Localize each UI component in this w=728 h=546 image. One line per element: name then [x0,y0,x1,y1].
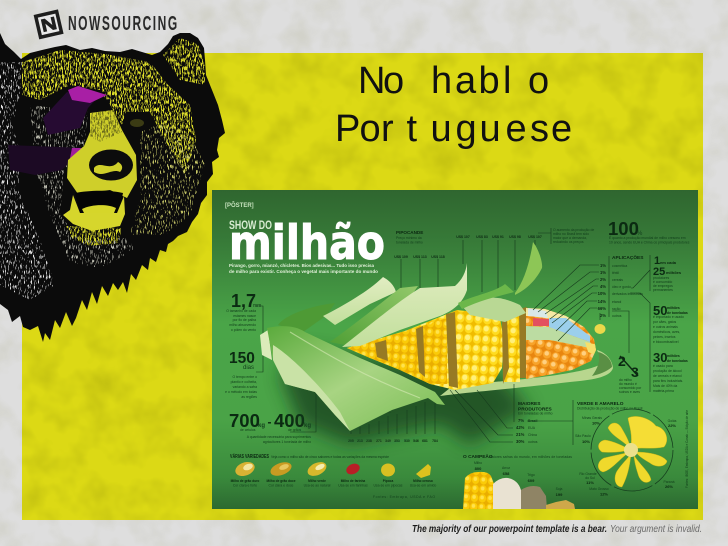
bar values: 353 [394,439,400,443]
stat: 700 kg / 400 kg: de grãos [288,428,301,432]
section: o campeao: O CAMPEÃO [463,453,493,460]
stat: 1,7 mm: mm [253,303,261,309]
stat: 50 milhões [630,293,688,392]
kernel: pipoca [373,464,403,488]
front leaf vein [290,332,420,398]
ring chart [591,409,673,491]
stat: 2/3: 2 [618,353,626,369]
usage names: etanol [612,300,621,304]
right leaf tip [515,242,542,295]
stat: 2/3: suínos e aves [619,390,640,394]
usage percentages [598,263,606,318]
heading: pipocando: PIPOCANDE [396,230,423,235]
credit line: Fontes: Embrapa, USDA e FAO [373,495,435,499]
stat: 700 kg / 400 kg: kg [304,423,311,429]
price lines [401,240,535,292]
poster tag: [PÔSTER] [225,201,254,209]
yellow tip [585,342,596,354]
bear nostrils highlight [94,162,122,174]
poster background [212,190,698,509]
usage names: derivados industriais [612,292,643,296]
stat: 30 milhões: Mais de 40% da [653,384,677,388]
producer rows [516,418,525,444]
kernel: milho de farinha: Usa-se em farinhas [338,484,368,488]
stat: 2/3: do mundo é [619,382,637,386]
state labels: 10% [582,439,590,444]
usage percentages: 10% [598,291,606,296]
grain pile labels [474,461,563,497]
grain pile: rice [493,478,521,509]
fur: yellow forehead [22,50,196,175]
top white kernels [526,308,578,323]
producer rows: 7% [518,418,524,423]
kernel: pipoca: Usa-se em pipocas [373,484,403,488]
state labels [575,416,677,496]
right leaf green [458,284,514,309]
grain pile: corn [463,472,494,509]
kernel: milho de farinha: Milho de farinha [341,479,365,483]
price labels [394,235,542,259]
section: verde e amarelo [527,400,689,496]
stat: 1 a cada 25 milhões: permanentes [653,288,673,292]
kernel: milho de grão dentado [266,460,296,488]
icon: single kernel [594,313,606,334]
stat: 150 dias: e o método em todas [225,390,257,394]
stat: 700 kg / 400 kg [229,392,316,444]
state labels: 12% [600,492,608,496]
price note [538,228,594,244]
stat: 30 milhões: é usado para [653,364,673,368]
stat: 150 dias: O tempo entre o [232,375,257,379]
bar values: 530 [404,439,410,443]
stat: 30 milhões [653,350,688,393]
section: maiores produtores: Em toneladas de milho [518,412,553,416]
bear lips [63,195,125,231]
eye stripe: dark purple bolt [43,92,100,135]
stat: 1,7 mm: por fio de palha [233,318,256,322]
kernel: milho de grão duro: Milho de grão duro [231,479,259,483]
bar values: 238 [366,439,372,443]
stat: 1 a cada 25 milhões: é consumido [653,280,672,284]
price note: milho no Brasil tem sido [553,232,589,236]
stat: 30 milhões: de cereais e etanol [653,374,682,378]
section: verde e amarelo: Distribuição da produção de milho no Brasil [577,406,643,410]
poster intro text: de milho para existir. Conheça o vegetal mais importante do mundo [229,269,378,274]
blue band [549,318,590,342]
bar values: 784 [432,439,438,443]
kernel: milho de grão dentado: Cor clara e doce [269,484,294,488]
stat: 1,7 mm: o pólen do vento [231,328,256,332]
poster intro text [229,263,378,274]
kernel: milho ceroso: Usa-se em amido [410,484,436,488]
state labels: 22% [668,423,676,428]
stat: 1,7 mm: O tamanho de cada [226,309,256,313]
fur: right cheek [130,122,205,235]
state labels: São Paulo [575,434,591,438]
usage percentages: 2% [600,277,606,282]
grain pile labels: 658 [503,471,510,476]
corn: kernels [347,305,613,396]
bear snout [67,110,137,198]
section: o campeao: Maiores safras do mundo, em milhões de toneladas [489,455,572,459]
kernel: milho de grão dentado: Milho de grão doce [266,479,296,483]
stat: 1 a cada 25 milhões: de empregos [653,284,673,288]
section: sobe e sobe: SOBE E SOBE [349,404,384,410]
usage names: outros [612,314,622,318]
stat: 700 kg / 400 kg: de cetulos [240,428,256,432]
stat: 30 milhões: milhões [667,354,680,358]
stat: 1 a cada 25 milhões [631,255,682,292]
title line 1: Nohablo [358,60,549,102]
pale back leaf [323,277,396,325]
state labels: 10% [592,420,600,426]
price note: maior que a demanda, [553,236,587,240]
caption regular part: Your argument is invalid. [610,524,702,535]
usage percentages: 1% [600,270,606,275]
stat: 700 kg / 400 kg: kg [258,423,265,429]
grain pile labels: 199 [556,492,563,497]
eye stripe: magenta highlight [68,86,107,103]
illustration: bear head [0,33,225,342]
state labels: 26% [665,484,673,489]
bear tongue [82,205,116,213]
stat: 150 dias: 150 [229,350,255,367]
producer rows: 42% [516,425,525,430]
logo: Nowsourcing [34,9,177,39]
grain pile: soy [546,500,575,509]
price labels: US$ 113 [413,255,427,259]
left deeper-yellow cob [347,318,447,384]
grain pile labels: Trigo [527,473,535,477]
stat: 50 milhões: e outros animais [653,325,678,329]
corn: husk leaves [260,242,542,431]
section: sobe e sobe: Produção mundial de milho, [349,410,391,414]
grain pile labels: Milho [474,461,482,465]
bear mouth [75,191,123,213]
usage percentages: 66% [598,306,606,311]
kernel: milho verde: Milho verde [308,479,326,483]
heading: aplicações: APLICAÇÕES [612,254,644,261]
title [335,60,572,150]
dark leaf under corn end [592,352,612,376]
stat: 1,7 mm: milho absorvendo [229,323,256,327]
stat: 50 milhões: milhões [667,306,680,310]
stat: 50 milhões: 50 [653,303,667,318]
stat: 50 milhões: é importado e usado [653,315,684,319]
grain pile labels: 609 [528,478,535,483]
green band [526,326,591,348]
section: o campeao [463,453,575,509]
price note: reduzindo os preços [553,240,584,244]
producer names [528,419,538,444]
kernel: pipoca: Pipoca [383,479,393,483]
section: maiores produtores: PRODUTORES [518,406,553,412]
stat: 50 milhões: domésticos, aves, [653,330,680,334]
stat: 700 kg / 400 kg: A quantidade necessária para suprimentos [247,435,311,439]
flower of corn kernels [598,416,667,487]
section: verde e amarelo: VERDE E AMARELO [577,401,624,407]
price note: O aumento da produção de [553,228,594,232]
stat: 1 a cada 25 milhões: milhões [666,270,682,275]
stat: 1 a cada 25 milhões: produtores [653,276,670,280]
stat: 50 milhões: e biocombustível [653,340,679,344]
grain pile labels: 800 [475,466,482,471]
stat: 2/3 [612,311,642,394]
price labels: US$ 83 [476,235,488,239]
kernel: milho de farinha [338,462,368,488]
stat: 30 milhões: para fins industriais. [653,379,683,383]
stat: 30 milhões: matéria-prima [653,389,674,393]
stat: 1,7 mm: estames nasce [233,314,256,318]
state labels: Goiás [668,419,677,423]
stat: 100%: 100 [608,218,639,239]
back dark leaf [278,303,335,332]
section: varias variedades: VÁRIAS VARIEDADES [230,453,269,460]
section: aplicacoes [533,254,644,341]
stat: 1 a cada 25 milhões: em cada [660,260,677,265]
bear nose [89,150,133,180]
vertical credit: Fontes: IBGE, Embrapa, USDA e Conab — Edição de arte [685,410,689,488]
stat: 2/3: consumido por [619,386,642,390]
stat: 1 a cada 25 milhões: 25 [653,266,665,278]
fur: grey hatching around the snout [30,105,135,268]
title line 2: Portuguese [335,108,572,150]
chart: sobe e sobe [348,398,438,443]
state labels: do Sul [585,476,595,480]
bar values: 349 [385,439,391,443]
bar lines by year [351,398,435,434]
bar values [348,439,438,443]
stat: 1,7 mm [226,291,263,334]
producer names: China [528,433,537,437]
left pale strip [260,330,272,360]
stat: 50 milhões: por cães, gatos [653,320,676,324]
stat: 150 dias: plantio e colheita, [231,380,257,384]
stat: 50 milhões: de toneladas [667,311,688,315]
section: pipoca prices: Preço mínimo da [396,236,422,240]
stat: 30 milhões: de toneladas [667,359,688,363]
price labels: US$ 118 [431,255,445,259]
usage percentages: 4% [600,284,606,289]
price labels: US$ 91 [492,235,504,239]
usage percentages: 14% [598,299,606,304]
coloured cob end [526,308,596,379]
stat: 100%: É quanto a produção mundial de milho cresceu em [609,235,686,240]
kernel: milho ceroso [410,464,436,488]
poster intro text: Pirango, gorro, mianzó, chicletes. Bios adesivas... Tudo isso precisa [229,263,375,268]
section: pipoca prices: tonelada de milho [396,240,423,244]
usage leader lines [533,265,599,341]
stat: 700 kg / 400 kg: 400 [274,410,305,431]
price labels: US$ 109 [394,255,408,259]
producer names: outros [528,440,538,444]
state labels: 11% [586,480,594,485]
footer caption [412,524,702,535]
front leaf fold [273,345,350,431]
producer rows: 30% [516,439,525,444]
stat: 1 a cada 25 milhões: 1 [654,255,660,267]
usage names: ração [612,307,621,311]
kernel: milho de grão duro [231,459,259,488]
stat: 150 dias: as regiões [241,395,257,399]
stat: 2/3: do milho [619,378,632,382]
bar values: 681 [422,439,428,443]
fur: white hatching on the left [0,62,55,300]
stat: 150 dias: variando a safra [233,385,257,389]
right leaf lower pale [460,297,526,322]
section: sobe e sobe: em toneladas [349,414,370,418]
bar values: 213 [357,439,363,443]
heading: milhão: milhão [229,216,385,271]
price labels: US$ 107 [528,235,542,239]
heading: show do: SHOW DO [229,218,272,232]
fur: yellow on the ear [163,38,205,85]
stat: 50 milhões: peixes, insetos [653,335,676,339]
price labels: US$ 98 [509,235,521,239]
bar values: 546 [413,439,419,443]
stat: 1,7 mm: 1,7 [231,291,256,311]
producer rows: 21% [516,432,525,437]
grain pile labels: Soja [556,487,563,491]
price labels: US$ 107 [456,235,470,239]
yellow cob [347,310,504,390]
pale band [528,308,548,318]
bear silhouette [0,33,225,342]
bear chin [66,226,122,246]
bear eye [130,119,144,127]
stat: 150 dias [225,350,263,399]
usage percentages: 2% [600,313,606,318]
kernel: milho verde [304,459,331,488]
usage names: cosmética [612,264,627,268]
section: varias variedades [230,453,436,499]
poster heading [229,216,385,271]
logo wordmark: NOWSOURCING [68,13,177,35]
section: maiores produtores [450,384,553,444]
section: pipoca prices [394,228,594,292]
stat: 100%: % [637,231,643,237]
usage percentages: 1% [600,263,606,268]
stat: 700 kg / 400 kg: agricultores 1 tonelada de milho [263,440,311,444]
stat: 2/3: 3 [631,364,639,380]
state labels: Paraná [664,480,675,484]
large pale leaf [342,263,467,347]
section: maiores produtores: MAIORES [518,401,541,407]
stat: 30 milhões: 30 [653,350,667,365]
stat: 30 milhões: produção de álcool [653,369,682,373]
state labels: Mato Grosso [589,487,609,491]
icon: N square [34,9,64,39]
stat: 150 dias: dias [243,365,254,371]
bar values: 205 [348,439,354,443]
stat: 700 kg / 400 kg: - [268,415,272,429]
middle cob section [504,314,520,382]
bear nose shadow hatching on snout [88,110,122,142]
producer names: Brasil [528,419,537,423]
caption bold part: The majority of our powerpoint template is a bear. [412,524,607,535]
eye stripe: lower purple bolt [8,145,84,175]
section: sobe e sobe [349,404,391,418]
usage names: óleo e gordo [612,285,631,289]
husk stem behind corn [440,350,613,396]
kernel: milho verde: Usa-se ao natural [304,484,331,488]
stat: 100%: 10 anos, sendo EUA e China os principais produtores [609,240,690,244]
grain pile labels: Arroz [502,466,510,470]
bar values: 271 [376,439,382,443]
shadow under corn [280,350,530,445]
red band [533,318,549,326]
state labels: Rio Grande [579,472,597,476]
panel: poster [212,190,698,509]
kernel: milho de grão duro: Cor clara e forte [233,484,257,488]
big front leaf [267,326,445,431]
usage names: têxtil [612,271,619,275]
kernel: milho ceroso: Milho ceroso [413,479,433,483]
stat: 100% [608,218,690,244]
usage names: cereais [612,278,623,282]
section: varias variedades: Veja como o milho são de cinco sabores e todas as variações da mesma espécie [271,455,389,459]
usage names [612,264,643,318]
state labels: Minas Gerais [582,416,602,420]
stat: 700 kg / 400 kg: 700 [229,410,260,431]
producer names: EUA [528,426,536,430]
mid green leaf [330,286,418,345]
eye stripe: lower magenta highlight [70,148,85,160]
husk strips between kernels [375,307,529,388]
grain pile: wheat [521,486,547,509]
